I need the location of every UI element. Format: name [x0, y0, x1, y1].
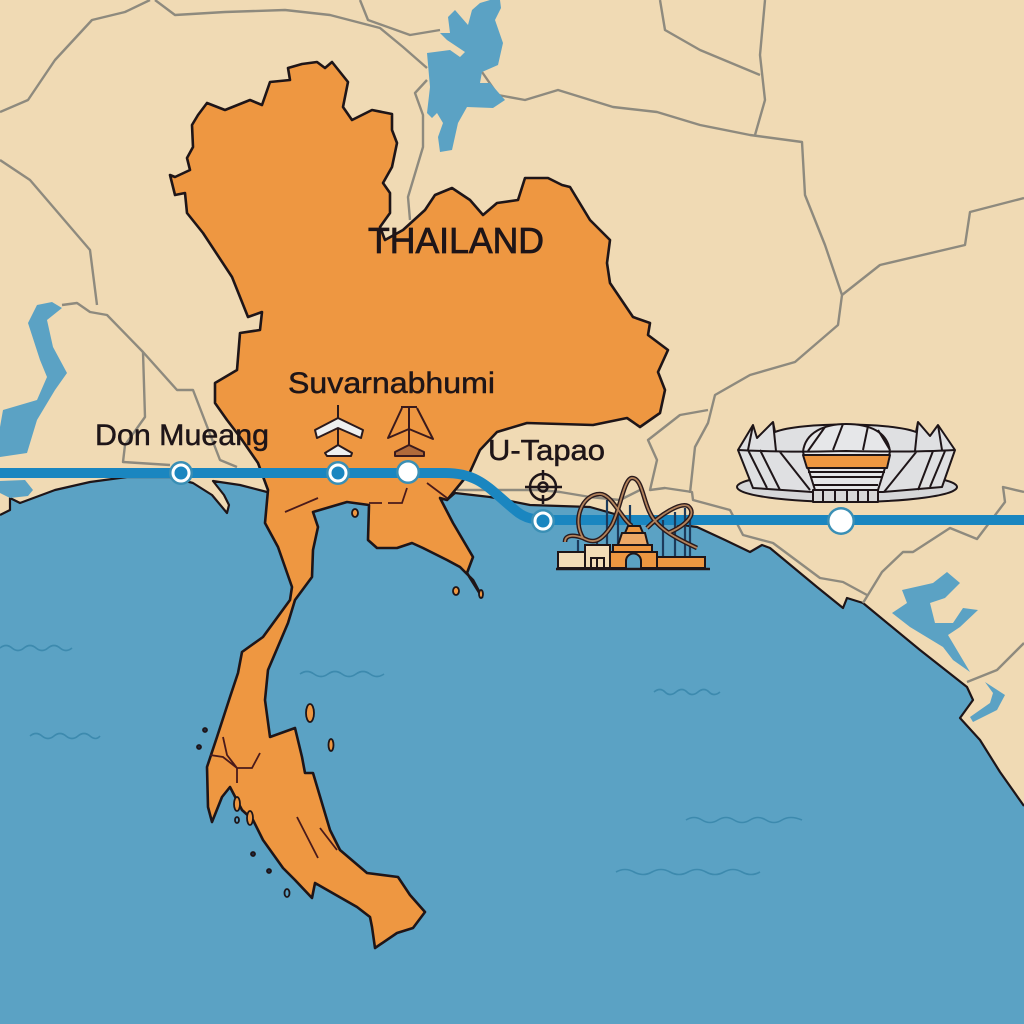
lake: coast west	[0, 480, 33, 498]
icon: plane 1	[315, 405, 363, 456]
icon: stadium	[737, 422, 957, 502]
icon: U-Tapao target	[525, 470, 562, 504]
lake: west river	[0, 302, 67, 457]
label: Suvarnabhumi: Suvarnabhumi	[288, 367, 495, 400]
label: Don Mueang: Don Mueang	[95, 419, 269, 452]
lake: north	[427, 0, 505, 152]
coastline	[0, 477, 1024, 806]
stations	[169, 460, 855, 535]
lake: southeast	[970, 682, 1005, 722]
lake: east	[892, 572, 978, 672]
islands	[197, 509, 483, 897]
Thailand	[170, 62, 668, 948]
sea waves	[0, 646, 802, 874]
icon: plane 2	[388, 407, 433, 456]
label: U-Tapao: U-Tapao	[488, 435, 605, 467]
neighbouring country borders	[0, 0, 1024, 682]
province lines	[210, 483, 447, 858]
rail line	[0, 473, 1024, 520]
sea	[0, 477, 1024, 1024]
icon: theme park	[556, 478, 710, 569]
title: THAILAND	[368, 220, 544, 261]
